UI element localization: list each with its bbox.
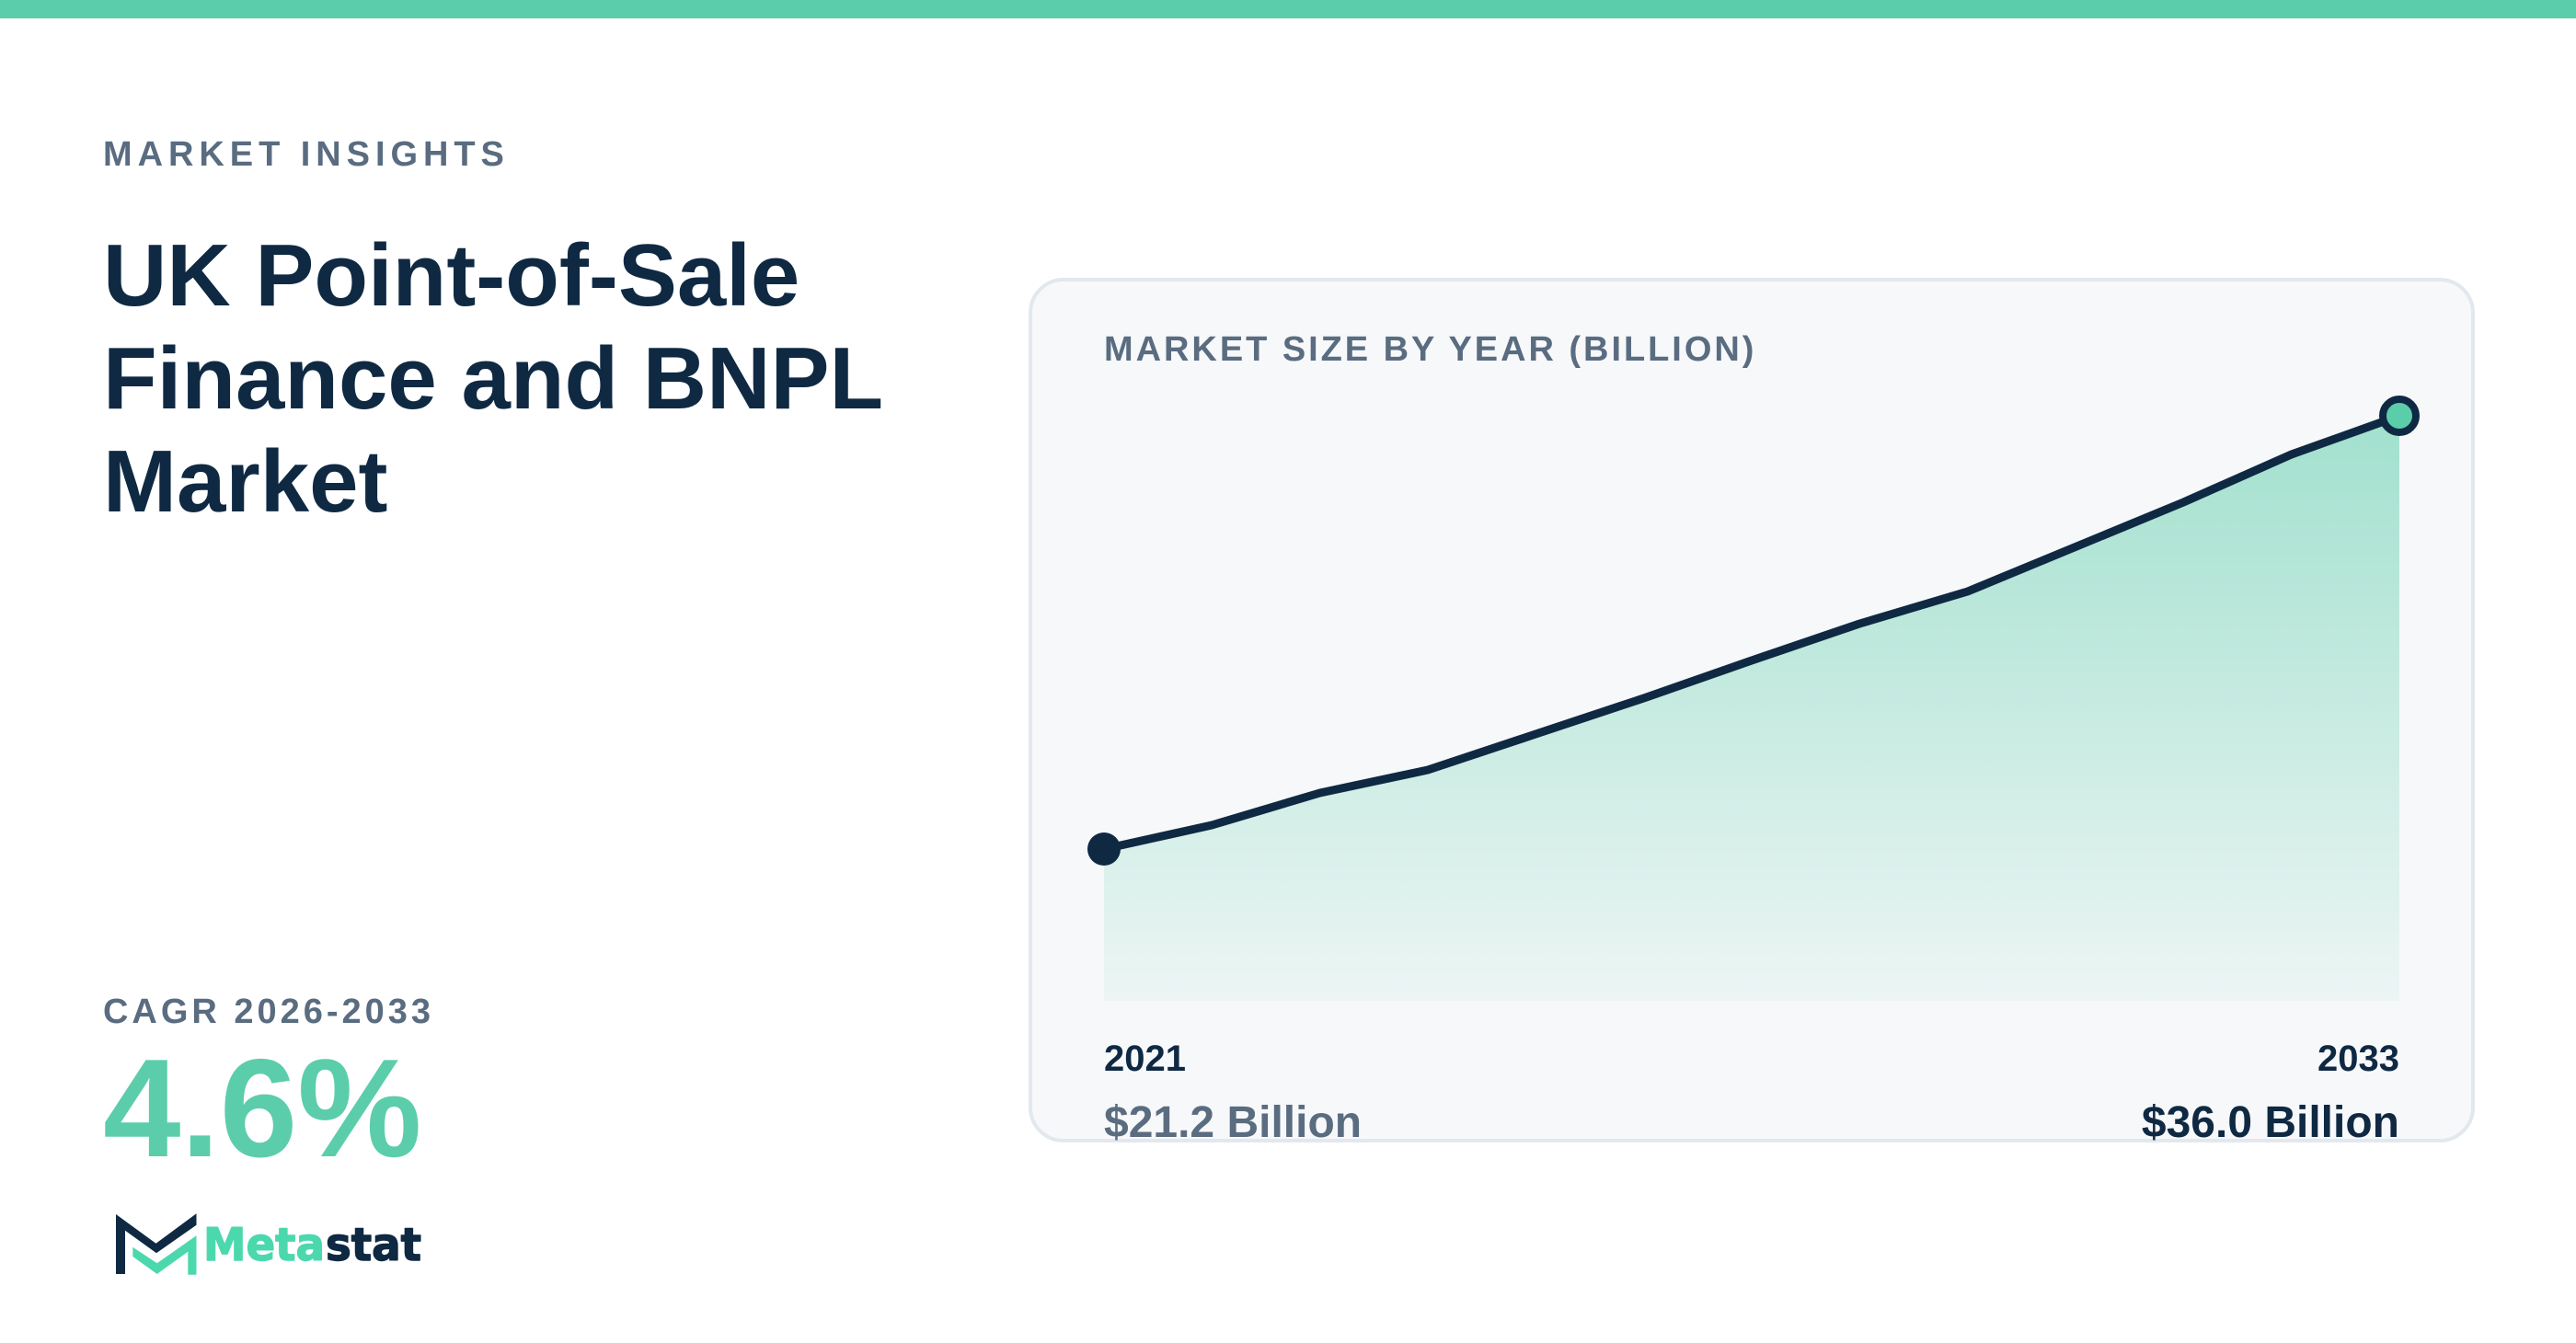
panel: market size chart card (1029, 278, 2475, 1142)
area fill (1104, 416, 2399, 1001)
title (103, 226, 883, 531)
logo: Metastat (116, 1213, 421, 1275)
title: Market (103, 432, 387, 531)
CAGR value: 4.6% (103, 1030, 421, 1187)
end marker (2383, 399, 2416, 432)
start marker (1087, 832, 1121, 866)
CAGR label: CAGR 2026-2033 (103, 993, 434, 1031)
logo wordmark: Meta (203, 1219, 325, 1271)
chart heading: MARKET SIZE BY YEAR (BILLION) (1104, 330, 1756, 369)
top accent bar (0, 0, 2576, 18)
area line chart (1087, 396, 2420, 1001)
start value: $21.2 Billion (1104, 1098, 1362, 1147)
logo wordmark: stat (326, 1219, 421, 1271)
start year: 2021 (1104, 1039, 1186, 1079)
logo wordmark (203, 1219, 421, 1271)
end value: $36.0 Billion (2142, 1098, 2399, 1147)
end year: 2033 (2317, 1039, 2399, 1079)
trend line (1104, 416, 2399, 849)
title: Finance and BNPL (103, 329, 883, 428)
eyebrow: market insights: MARKET INSIGHTS (103, 135, 510, 174)
logo mark: navy M (116, 1213, 197, 1274)
title: UK Point-of-Sale (103, 226, 799, 325)
logo mark: green chevron (132, 1235, 197, 1275)
